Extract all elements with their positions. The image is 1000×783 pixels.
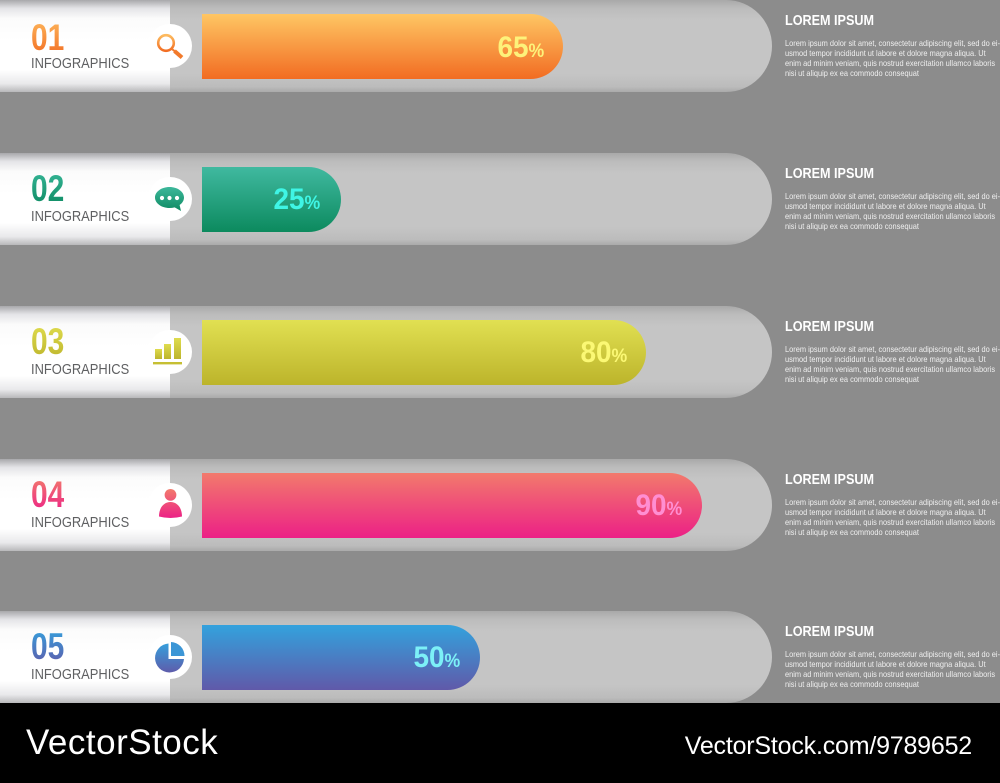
track [0,459,772,551]
label: INFOGRAPHICS [31,55,129,72]
icon: pie chart [155,642,184,672]
row 2: 25% [0,153,1000,245]
progress bar [202,473,702,538]
body text [785,191,1000,231]
label: INFOGRAPHICS [31,208,129,225]
row 5: 50% [0,611,1000,703]
icon: speech bubble [155,187,184,211]
body text [785,344,1000,384]
icon: person [159,489,182,518]
progress bar [202,14,563,79]
body text: usmod tempor incididunt ut labore et dolore magna aliqua. Ut [785,354,986,364]
track [0,611,772,703]
heading: LOREM IPSUM [785,319,874,335]
body text: enim ad minim veniam, quis nostrud exercitation ullamco laboris [785,364,995,374]
body text: Lorem ipsum dolor sit amet, consectetur adipiscing elit, sed do ei- [785,649,1000,659]
percentage: 50% [413,641,460,674]
body text [785,497,1000,537]
number: 01 [31,17,64,58]
icon badge [148,330,192,374]
progress bar [202,167,341,232]
image url: VectorStock.com/9789652 [685,732,972,760]
icon badge [148,635,192,679]
body text: nisi ut aliquip ex ea commodo consequat [785,527,919,537]
brand name: VectorStock [26,723,218,762]
percentage: 80% [580,336,627,369]
heading: LOREM IPSUM [785,472,874,488]
body text: nisi ut aliquip ex ea commodo consequat [785,679,919,689]
icon: magnifier [156,34,184,59]
icon badge [148,177,192,221]
text block [785,166,1000,231]
text block [785,624,1000,689]
label: INFOGRAPHICS [31,361,129,378]
number: 02 [31,168,64,209]
body text: usmod tempor incididunt ut labore et dolore magna aliqua. Ut [785,507,986,517]
text block [785,472,1000,537]
label: INFOGRAPHICS [31,514,129,531]
body text: usmod tempor incididunt ut labore et dolore magna aliqua. Ut [785,48,986,58]
heading: LOREM IPSUM [785,166,874,182]
body text: enim ad minim veniam, quis nostrud exercitation ullamco laboris [785,58,995,68]
body text: nisi ut aliquip ex ea commodo consequat [785,221,919,231]
number: 05 [31,626,64,667]
body text: Lorem ipsum dolor sit amet, consectetur adipiscing elit, sed do ei- [785,191,1000,201]
icon badge [148,483,192,527]
track [0,153,772,245]
icon: bar chart [153,338,182,364]
body text: Lorem ipsum dolor sit amet, consectetur adipiscing elit, sed do ei- [785,344,1000,354]
text block [785,319,1000,384]
number: 04 [31,474,64,515]
footer watermark band [0,703,1000,783]
percentage: 90% [635,489,682,522]
progress bar [202,320,646,385]
body text [785,38,1000,78]
track [0,0,772,92]
body text: usmod tempor incididunt ut labore et dolore magna aliqua. Ut [785,659,986,669]
row 1: 65% [0,0,1000,92]
body text: nisi ut aliquip ex ea commodo consequat [785,68,919,78]
body text: Lorem ipsum dolor sit amet, consectetur adipiscing elit, sed do ei- [785,38,1000,48]
percentage: 65% [497,31,544,64]
body text: nisi ut aliquip ex ea commodo consequat [785,374,919,384]
body text: enim ad minim veniam, quis nostrud exercitation ullamco laboris [785,211,995,221]
body text: usmod tempor incididunt ut labore et dolore magna aliqua. Ut [785,201,986,211]
heading: LOREM IPSUM [785,624,874,640]
label: INFOGRAPHICS [31,666,129,683]
row 4: 90% [0,459,1000,551]
track [0,306,772,398]
number: 03 [31,321,64,362]
text block [785,13,1000,78]
progress bar [202,625,480,690]
body text: enim ad minim veniam, quis nostrud exercitation ullamco laboris [785,517,995,527]
icon badge [148,24,192,68]
body text [785,649,1000,689]
row 3: 80% [0,306,1000,398]
percentage: 25% [273,183,320,216]
body text: Lorem ipsum dolor sit amet, consectetur adipiscing elit, sed do ei- [785,497,1000,507]
heading: LOREM IPSUM [785,13,874,29]
body text: enim ad minim veniam, quis nostrud exercitation ullamco laboris [785,669,995,679]
